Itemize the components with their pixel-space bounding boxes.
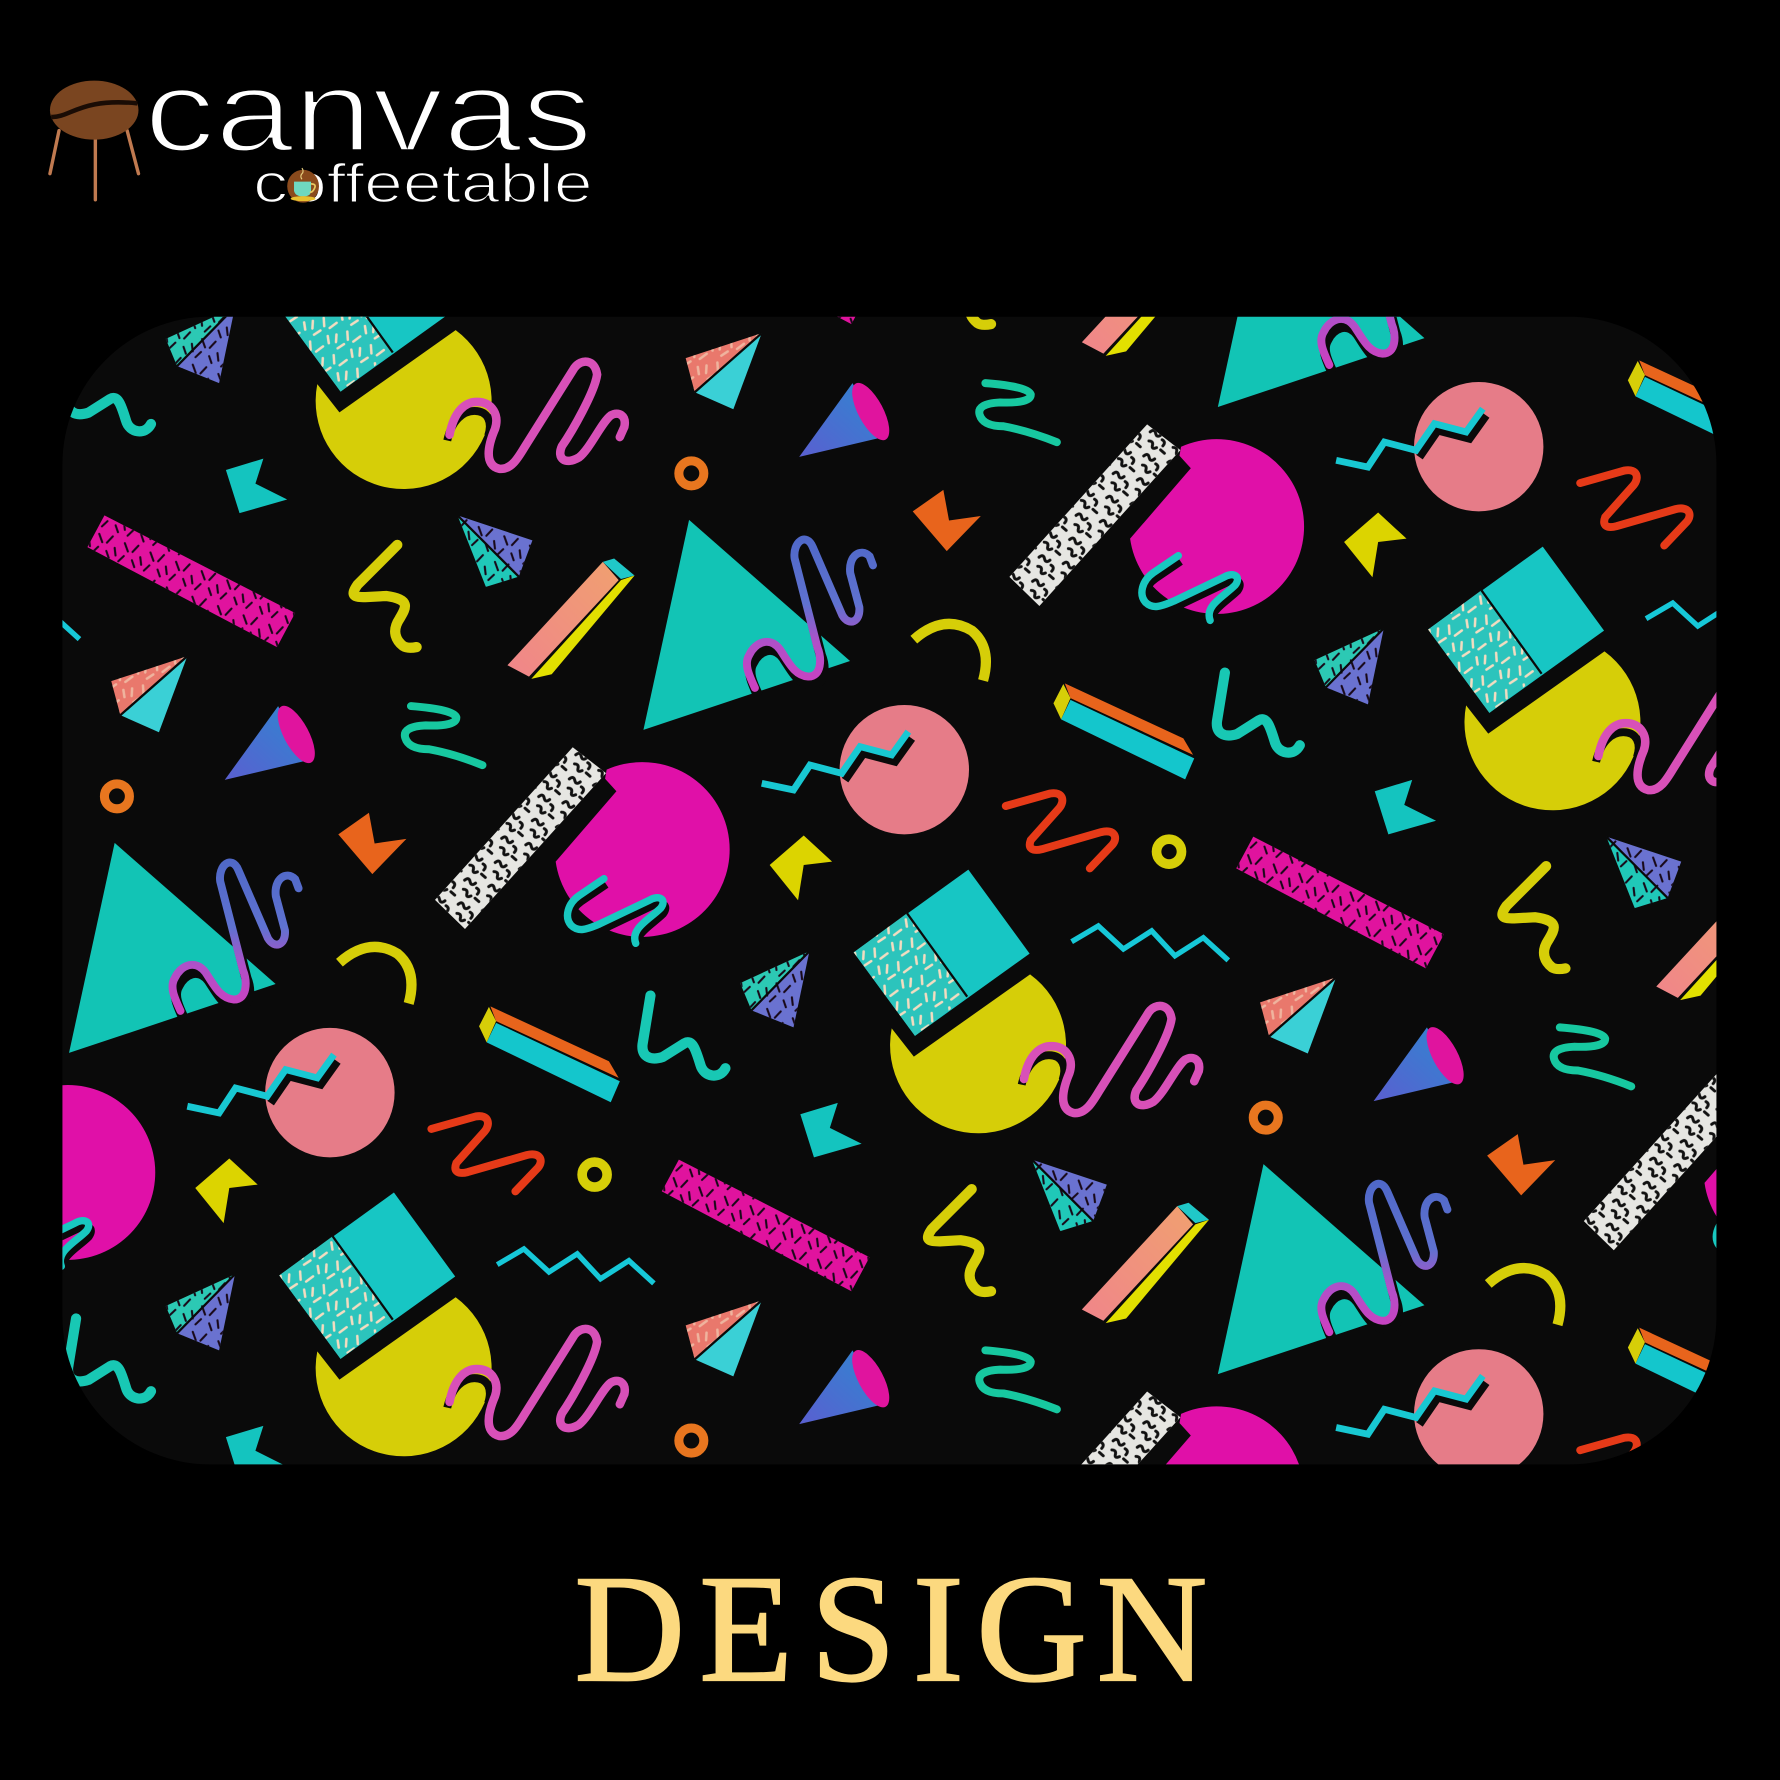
pyramid: indigo and teal	[457, 515, 532, 587]
ring: orange	[679, 461, 704, 486]
pyramid: teal and indigo	[740, 951, 809, 1027]
memphis pattern	[62, 316, 1716, 1464]
icon: coffee bean table	[50, 81, 138, 200]
bar: teal and orange 3D	[479, 1006, 620, 1102]
bar: magenta speckled	[87, 515, 295, 647]
logo word: coffeetable: coffeetable	[253, 153, 593, 214]
logo: canvas coffeetable	[50, 46, 593, 214]
triangle: teal with squiggle	[643, 520, 873, 730]
title: DESIGN: DESIGN	[574, 1544, 1207, 1714]
panel: patterned mat	[62, 316, 1716, 1464]
chevron: teal	[226, 459, 287, 513]
squiggle: teal	[642, 996, 725, 1076]
chevron: orange	[338, 813, 406, 874]
pyramid: coral and teal	[111, 656, 187, 732]
arc: yellow	[339, 947, 411, 1004]
pattern repeats	[62, 316, 1716, 1464]
yellow semicircle with teal square	[279, 225, 625, 489]
squiggle: yellow	[354, 545, 417, 648]
cone: blue and magenta	[225, 701, 322, 780]
icon: coffee cup	[287, 168, 319, 203]
pink circle with teal zigzag	[187, 1028, 395, 1157]
chevron: yellow	[195, 1158, 258, 1223]
squiggle: red	[431, 1116, 541, 1191]
bar: pink 3D	[507, 559, 635, 679]
zigzag: teal	[1072, 926, 1228, 960]
squiggle: green	[405, 706, 482, 765]
magenta circle with speckled bar	[435, 747, 730, 949]
ring: yellow	[1157, 839, 1182, 864]
logo word: canvas: canvas	[144, 46, 593, 176]
